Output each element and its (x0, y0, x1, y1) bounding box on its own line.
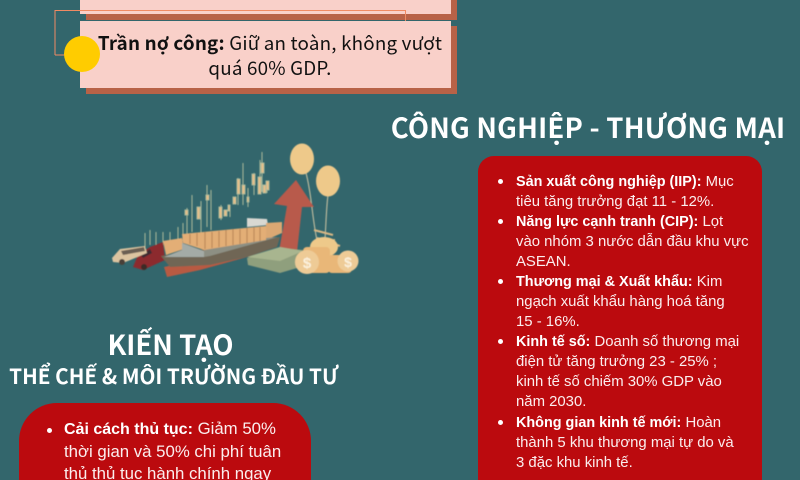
orange outline frame (54, 10, 406, 56)
illustration: ship, vehicles, arrow, balloons and coins (112, 142, 360, 278)
text: competitiveness (516, 214, 749, 270)
heading: industry and trade: CÔNG NGHIỆP - THƯƠNG MẠI (391, 106, 785, 146)
heading: institutions and investment environment: THỂ CHẾ & MÔI TRƯỜNG ĐẦU TƯ (9, 360, 338, 390)
text: public debt ceiling (98, 29, 442, 81)
text: public debt ceiling: Trần nợ công: Giữ an toàn, không vượt (98, 29, 442, 56)
candlestick chart (145, 152, 269, 247)
red truck (163, 238, 184, 255)
text: competitiveness: ASEAN. (516, 254, 571, 270)
text: trade and export (516, 274, 725, 330)
text: trade and export: Thương mại & Xuất khẩu: Kim (516, 274, 722, 290)
text: industrial production: tiêu tăng trưởng đạt 11 - 12%. (516, 194, 714, 210)
white van (112, 246, 147, 263)
bullet (498, 420, 503, 425)
text: competitiveness: vào nhóm 3 nước dẫn đầu khu vực (516, 234, 749, 250)
text: digital economy (516, 334, 739, 410)
ship (164, 250, 267, 277)
red arrow (274, 180, 314, 252)
text: new economic space: thành 5 khu thương mại tự do và (516, 435, 734, 451)
bullet (498, 339, 503, 344)
text: procedure reform (64, 419, 281, 480)
bullet (498, 279, 503, 284)
text: procedure reform: thời gian và 50% chi phí tuân (64, 442, 281, 461)
text: digital economy: điện tử tăng trưởng 23 - 25% ; (516, 354, 717, 370)
text: procedure reform: Cải cách thủ tục: Giảm 50% (64, 419, 276, 438)
panel: right red card (478, 156, 762, 480)
text: competitiveness: Năng lực cạnh tranh (CIP): Lọt (516, 214, 723, 230)
icon: yellow circle (64, 36, 100, 72)
text: trade and export: 15 - 16%. (516, 314, 580, 330)
text: new economic space: 3 đặc khu kinh tế. (516, 455, 633, 471)
panel: public debt ceiling card (80, 21, 457, 94)
text: industrial production (516, 174, 734, 210)
text: digital economy: năm 2030. (516, 394, 586, 410)
text: trade and export: ngạch xuất khẩu hàng hoá tăng (516, 294, 725, 310)
heading: building: KIẾN TẠO (107, 323, 234, 363)
bullet (498, 179, 503, 184)
text: new economic space (516, 415, 734, 471)
balloons (306, 173, 318, 245)
panel: top pink card shadow and card (80, 0, 457, 20)
cash stack (247, 248, 303, 273)
text: new economic space: Không gian kinh tế mới: Hoàn (516, 415, 721, 431)
bullet (498, 219, 503, 224)
text: digital economy: Kinh tế số: Doanh số thương mại (516, 334, 739, 350)
text: industrial production: Sản xuất công nghiệp (IIP): Mục (516, 174, 734, 190)
text: digital economy: kinh tế số chiếm 30% GDP vào (516, 374, 722, 390)
text: public debt ceiling: quá 60% GDP. (208, 54, 332, 81)
panel: left red card (19, 403, 311, 480)
bullet (47, 428, 52, 433)
dollar signs: $ (303, 255, 312, 272)
coins (314, 230, 340, 246)
illustration: ship, vehicles, arrow, balloons and coins: $ (344, 254, 352, 270)
